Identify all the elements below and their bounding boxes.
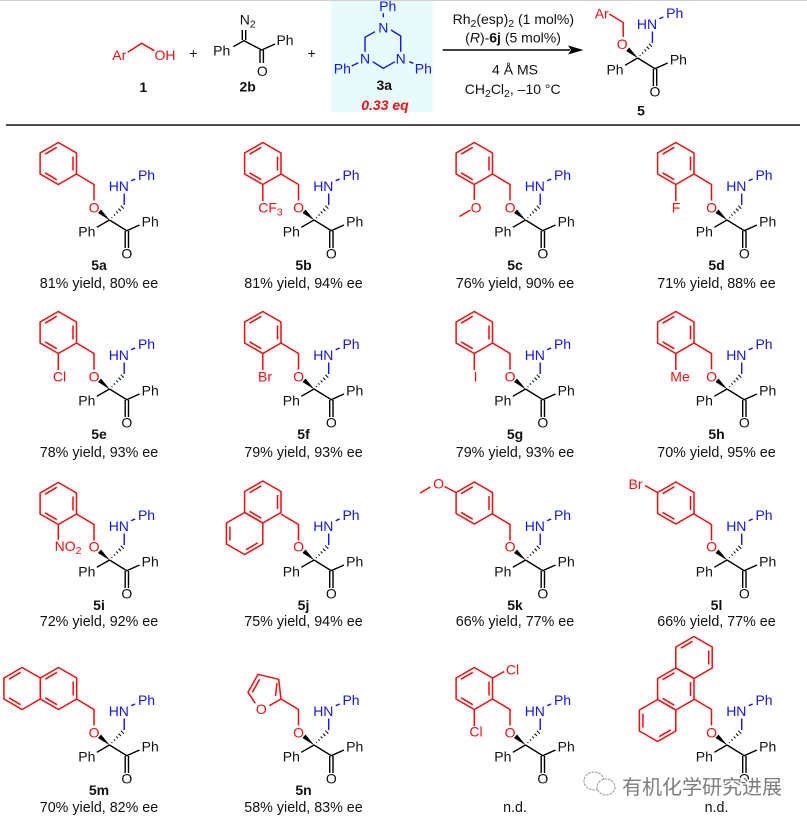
compound 5n: Ph [346, 739, 363, 755]
compound: 2,6-dichloro, not detected: Ph [558, 739, 575, 755]
reagent 3a: 0.33 eq [361, 97, 409, 113]
compound 5f: HN [313, 347, 333, 363]
compound 5l: Ph [759, 554, 776, 570]
panel: reagent 3a highlight [331, 1, 432, 112]
compound 5d: HN [726, 178, 746, 194]
compound 5h: O [706, 368, 717, 384]
compound 5c [456, 142, 575, 292]
compound 5f [244, 312, 363, 461]
compound 5c: Ph [494, 224, 511, 240]
product 5: HN [637, 16, 657, 32]
compound 5l [628, 476, 776, 630]
compound: 9-anthracenyl, not detected [639, 636, 776, 816]
reaction conditions and arrow: 2 [485, 88, 491, 100]
compound 5k: HN [525, 518, 545, 534]
compound 5j: HN [313, 518, 333, 534]
compound 5h: O [739, 414, 750, 430]
compound 5a [40, 142, 159, 292]
compound 5f: Br [258, 368, 272, 384]
compound: 9-anthracenyl, not detected: O [706, 724, 717, 740]
reaction conditions and arrow: 2 [508, 18, 514, 30]
plus sign: + [308, 45, 316, 61]
product 5: Ph [606, 62, 624, 78]
compound 5e: Ph [142, 383, 159, 399]
compound 5j: Ph [346, 554, 363, 570]
compound 5h: Ph [696, 393, 713, 409]
compound 5k: O [433, 476, 444, 492]
compound 5b: Ph [346, 214, 363, 230]
reaction conditions and arrow: Rh [453, 11, 471, 27]
reaction conditions and arrow: Cl [491, 81, 504, 97]
compound 5n: O [256, 701, 267, 717]
compound 5l: HN [726, 518, 746, 534]
compound: 2,6-dichloro, not detected: O [505, 724, 516, 740]
reactant 2b: Ph [276, 32, 294, 48]
product 5: O [650, 83, 661, 99]
compound 5i: Ph [138, 507, 155, 523]
reagent 3a: N [378, 20, 388, 36]
compound 5f: O [326, 414, 337, 430]
divider [6, 124, 800, 126]
reactant 2b: 2 [250, 18, 256, 30]
compound 5g: 5g [507, 426, 523, 442]
reagent 3a: N [396, 50, 406, 66]
compound: 2,6-dichloro, not detected: Cl [506, 662, 519, 678]
compound 5e: O [121, 414, 132, 430]
reagent 3a: Ph [415, 60, 432, 76]
compound 5g: Ph [494, 393, 511, 409]
compound 5e: 5e [91, 426, 107, 442]
compound 5e: Cl [53, 368, 66, 384]
compound 5e: 78% yield, 93% ee [40, 445, 158, 461]
product 5: Ph [666, 5, 683, 21]
compound 5j [226, 481, 363, 630]
compound 5h: Me [670, 368, 690, 384]
compound 5l: 66% yield, 77% ee [657, 614, 776, 630]
compound 5g [456, 312, 575, 461]
product 5: 5 [637, 102, 645, 118]
reaction conditions and arrow: 4 Å MS [492, 62, 538, 78]
compound 5d: Ph [696, 224, 713, 240]
reaction conditions and arrow: 2 [504, 88, 510, 100]
compound 5l: Ph [696, 564, 713, 580]
reaction conditions and arrow: (1 mol%) [514, 11, 574, 27]
compound 5n: O [326, 770, 337, 786]
reagent 3a [334, 0, 432, 113]
compound 5g: HN [525, 347, 545, 363]
compound 5i: O [121, 585, 132, 601]
compound 5d: 5d [708, 257, 725, 273]
compound: 9-anthracenyl, not detected: Ph [755, 692, 773, 708]
compound 5j: O [326, 585, 337, 601]
compound 5g: Ph [558, 383, 575, 399]
compound: 9-anthracenyl, not detected: n.d. [705, 800, 728, 816]
compound 5h: 70% yield, 95% ee [657, 445, 776, 461]
compound 5g: O [505, 368, 516, 384]
compound 5j: Ph [342, 507, 360, 523]
compound 5b: 5b [295, 257, 312, 273]
compound 5n: 5n [295, 782, 312, 798]
compound 5n: Ph [283, 749, 300, 765]
compound 5c: Ph [558, 214, 575, 230]
compound 5b [244, 142, 363, 292]
compound 5i [40, 482, 159, 630]
reaction conditions and arrow: 2 [471, 18, 477, 30]
compound 5b: O [326, 245, 337, 261]
compound: 9-anthracenyl, not detected: HN [726, 703, 746, 719]
compound: 2,6-dichloro, not detected: n.d. [503, 800, 527, 816]
compound 5b: HN [313, 178, 333, 194]
reactant 1 [112, 43, 176, 95]
compound 5g: O [537, 414, 548, 430]
compound 5m: O [121, 770, 132, 786]
compound 5a: O [121, 245, 132, 261]
compound 5e: HN [109, 347, 129, 363]
compound 5b: Ph [283, 224, 300, 240]
compound 5k: O [505, 538, 516, 554]
compound 5l: Ph [755, 507, 773, 523]
compound 5i: Ph [142, 554, 159, 570]
compound 5j: O [293, 538, 304, 554]
reagent 3a: 3a [377, 77, 392, 93]
compound 5d: 71% yield, 88% ee [657, 276, 776, 292]
compound 5m: 70% yield, 82% ee [40, 800, 158, 816]
compound: 9-anthracenyl, not detected: O [739, 770, 750, 786]
compound 5i: HN [109, 518, 129, 534]
watermark text: 有机化学研究进展 [622, 776, 782, 799]
reaction conditions and arrow: (R)-6j (5 mol%) [465, 30, 561, 46]
reaction conditions and arrow: , –10 °C [510, 81, 561, 97]
compound 5f: O [293, 368, 304, 384]
compound 5h [657, 312, 776, 461]
compound: 2,6-dichloro, not detected: Ph [554, 692, 571, 708]
compound 5a: Ph [142, 214, 159, 230]
product 5: Ar [595, 5, 609, 21]
reaction conditions and arrow: (esp) [476, 11, 508, 27]
compound 5i: NO [55, 538, 76, 554]
compound 5n: HN [313, 703, 333, 719]
reactant 1: OH [154, 47, 176, 63]
compound 5d: Ph [755, 167, 773, 183]
compound 5h: 5h [708, 426, 725, 442]
compound 5d [657, 142, 776, 292]
compound 5a: HN [109, 178, 129, 194]
compound 5m: O [89, 724, 100, 740]
compound 5m: Ph [78, 749, 95, 765]
reactant 1: Ar [112, 47, 127, 63]
compound 5l: 5l [711, 597, 722, 613]
compound: 9-anthracenyl, not detected: Ph [759, 739, 776, 755]
compound 5e [40, 312, 159, 461]
compound 5n: Ph [342, 692, 360, 708]
compound 5g: 79% yield, 93% ee [456, 445, 574, 461]
plus sign: + [189, 45, 197, 61]
product 5: Ph [670, 52, 687, 68]
compound 5c: 76% yield, 90% ee [456, 276, 574, 292]
reagent 3a: N [360, 50, 370, 66]
compound 5k: Ph [558, 554, 575, 570]
compound 5g: I [474, 368, 477, 384]
compound 5c: O [471, 199, 482, 215]
compound 5m: Ph [138, 692, 155, 708]
compound 5d: F [672, 199, 680, 215]
compound 5d: O [739, 245, 750, 261]
compound 5k: 5k [507, 597, 523, 613]
compound 5n: O [293, 724, 304, 740]
compound 5i: 2 [76, 545, 82, 557]
reactant 2b [213, 12, 294, 94]
compound 5c: HN [525, 178, 545, 194]
compound 5a: Ph [78, 224, 95, 240]
compound 5k: Ph [494, 564, 511, 580]
compound 5f: Ph [283, 393, 300, 409]
reactant 2b: O [257, 63, 268, 79]
compound 5l: Br [628, 476, 643, 492]
compound 5k: 66% yield, 77% ee [456, 614, 574, 630]
compound 5m: 5m [89, 782, 109, 798]
compound: 9-anthracenyl, not detected: Ph [696, 749, 713, 765]
compound 5g: Ph [554, 336, 571, 352]
compound 5f: Ph [342, 336, 360, 352]
reagent 3a: Ph [334, 60, 351, 76]
compound 5d: Ph [759, 214, 776, 230]
compound 5d: O [706, 199, 717, 215]
product 5: O [617, 36, 628, 52]
compound 5a: O [89, 199, 100, 215]
compound 5k: Ph [554, 507, 571, 523]
compound 5e: O [89, 368, 100, 384]
compound 5c: Ph [554, 167, 571, 183]
compound: 2,6-dichloro, not detected: HN [525, 703, 545, 719]
compound 5b: Ph [342, 167, 360, 183]
compound 5l: O [706, 538, 717, 554]
compound 5i: 5i [93, 597, 105, 613]
compound 5a: 5a [91, 257, 107, 273]
icon: chat watermark [584, 772, 615, 795]
compound 5i: O [89, 538, 100, 554]
compound 5f: 5f [297, 426, 310, 442]
compound 5n: 58% yield, 83% ee [244, 800, 363, 816]
compound 5j: Ph [283, 564, 300, 580]
compound 5c: O [505, 199, 516, 215]
compound 5e: Ph [138, 336, 155, 352]
compound 5n [244, 674, 363, 816]
compound 5b: CF [258, 199, 277, 215]
compound: 2,6-dichloro, not detected: O [537, 770, 548, 786]
compound 5b: O [293, 199, 304, 215]
compound 5h: HN [726, 347, 746, 363]
compound 5j: 75% yield, 94% ee [244, 614, 363, 630]
compound 5h: Ph [755, 336, 773, 352]
compound 5f: 79% yield, 93% ee [244, 445, 363, 461]
compound 5i: 72% yield, 92% ee [40, 614, 158, 630]
compound 5e: Ph [78, 393, 95, 409]
product 5 [595, 5, 687, 118]
compound 5b: 81% yield, 94% ee [244, 276, 363, 292]
compound 5a: Ph [138, 167, 155, 183]
compound 5m: HN [109, 703, 129, 719]
compound 5k: O [537, 585, 548, 601]
compound: 2,6-dichloro, not detected: Ph [494, 749, 511, 765]
reactant 2b: N [240, 12, 250, 28]
compound 5c: 5c [507, 257, 523, 273]
compound 5j: 5j [298, 597, 309, 613]
reactant 1: 1 [139, 79, 147, 95]
compound 5b: 3 [277, 206, 283, 218]
reactant 2b: Ph [213, 42, 230, 58]
compound 5i: Ph [78, 564, 95, 580]
reaction conditions and arrow [443, 11, 584, 100]
compound 5f: Ph [346, 383, 363, 399]
reaction conditions and arrow: CH [465, 81, 485, 97]
compound 5l: O [739, 585, 750, 601]
compound: 2,6-dichloro, not detected: Cl [469, 724, 483, 740]
compound 5m: Ph [142, 739, 159, 755]
compound 5m [4, 668, 159, 816]
compound: 2,6-dichloro, not detected [456, 662, 575, 816]
reactant 2b: 2b [240, 78, 256, 94]
compound 5k [420, 476, 575, 630]
compound 5h: Ph [759, 383, 776, 399]
compound 5c: O [537, 245, 548, 261]
compound 5a: 81% yield, 80% ee [40, 276, 158, 292]
